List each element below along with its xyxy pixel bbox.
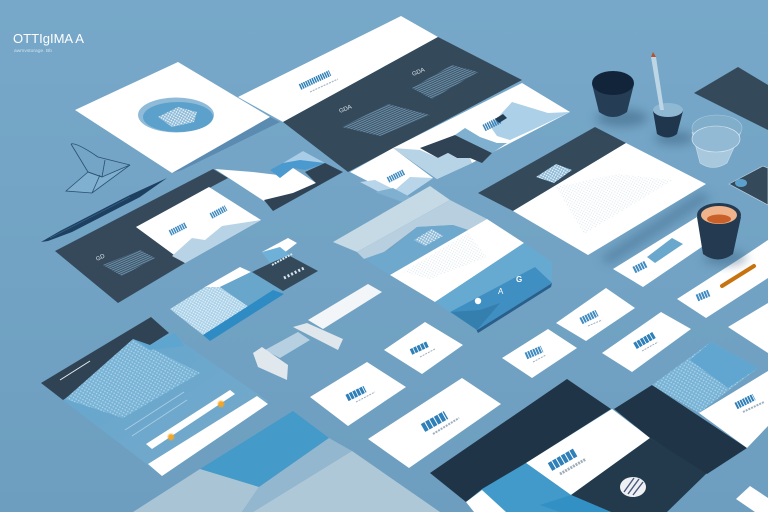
text block: GDA [412, 67, 426, 78]
logo [300, 73, 338, 92]
text block [339, 65, 478, 136]
card [310, 362, 406, 426]
card [556, 288, 635, 341]
sheet shadow [600, 192, 712, 264]
card [502, 329, 577, 378]
panel: bottom geometric shapes [133, 411, 440, 512]
icon: pen [41, 178, 167, 242]
panel: dither sheet [170, 238, 318, 341]
card [368, 378, 501, 468]
card [736, 486, 768, 512]
panel: dark sheet with card: GD [95, 253, 107, 263]
card [728, 303, 768, 353]
card with orange bar [677, 240, 768, 318]
icons on blue: G [516, 275, 522, 284]
title: OTTIgIMA A [13, 31, 84, 46]
panel: mountain page [393, 83, 570, 179]
panel: white page with circle [75, 62, 280, 173]
dark sheet top right [694, 67, 768, 130]
panel: small white sheet [350, 148, 433, 203]
icon: blue circle [138, 98, 214, 132]
pencil [651, 57, 664, 110]
panel: top spread [238, 16, 522, 172]
icon: striped circle [620, 477, 646, 497]
panel: mountain sheet [215, 151, 343, 211]
panel: large white sheet [478, 127, 706, 255]
icon: origami outline [66, 144, 130, 193]
panel: paper strips [253, 284, 382, 380]
card [384, 322, 463, 374]
title [13, 31, 84, 53]
orange bar [722, 266, 754, 286]
icons on blue: A [498, 287, 504, 296]
text block: GDA [339, 104, 353, 115]
panel: dark header sheet with chart [41, 317, 268, 476]
panel: centre glass sheet [333, 186, 552, 333]
panel: dark sheet with card [55, 169, 261, 303]
card [602, 312, 691, 372]
icon: pencil cup [651, 52, 694, 145]
icon: black cup [592, 71, 648, 127]
card with swatch [613, 217, 712, 287]
icons on blue [475, 275, 522, 304]
icon: orange cup [697, 203, 747, 265]
panel: bottom dark folder [430, 342, 768, 512]
icon: glass [692, 115, 742, 168]
tablet [729, 166, 768, 205]
title: awmvstorage. Bb [14, 48, 53, 53]
